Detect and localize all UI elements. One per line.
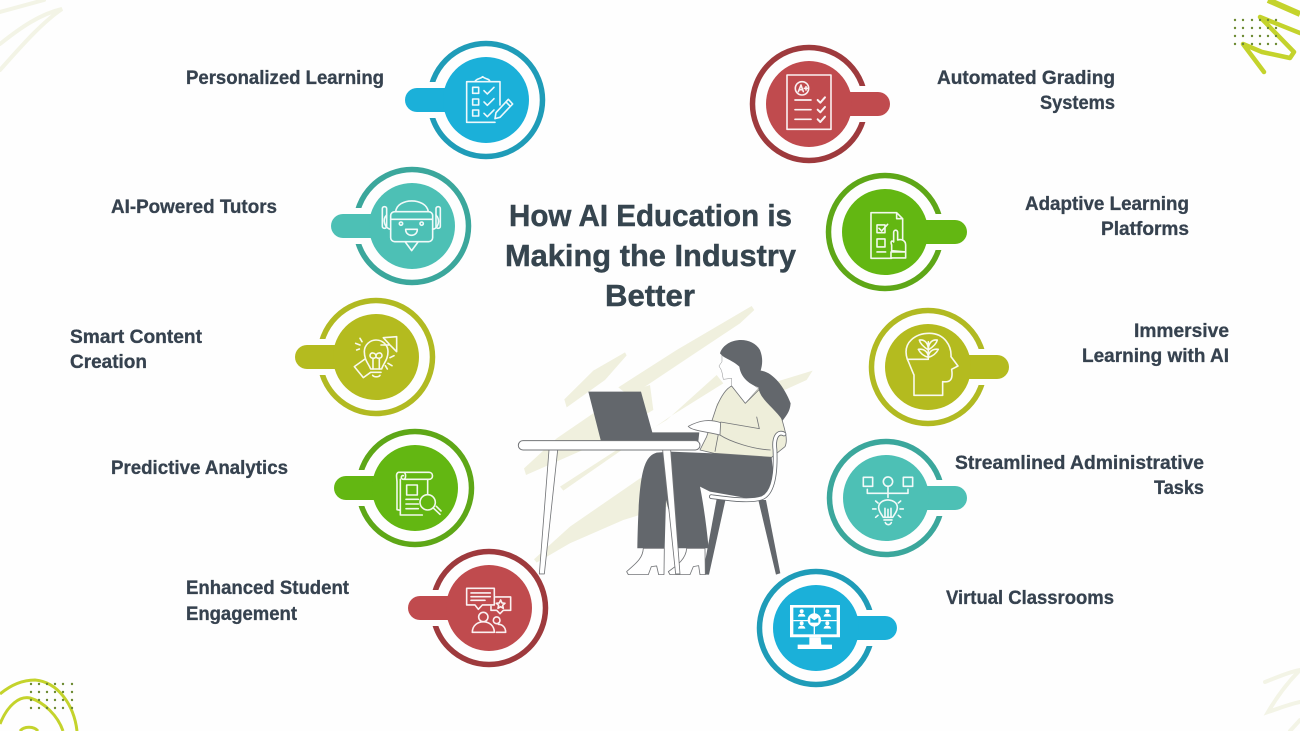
title: Better: [605, 278, 695, 313]
table legs: [539, 450, 558, 574]
label: Enhanced Student Engagement: Engagement: [186, 604, 298, 625]
label: Streamlined Administrative Tasks: Tasks: [1154, 478, 1204, 499]
badge: Immersive Learning with AI: [872, 310, 1009, 424]
label: Enhanced Student Engagement: [186, 578, 350, 625]
chair back and seat: [711, 433, 784, 500]
label: Adaptive Learning Platforms: Platforms: [1101, 219, 1189, 240]
title: [505, 198, 797, 313]
icon: report with magnifier: [397, 472, 441, 515]
face and neck: [719, 355, 758, 403]
boots: [627, 548, 664, 575]
icon: graded A+ paper: [787, 75, 831, 129]
brush strokes behind figure: [524, 306, 813, 563]
ponytail and hair: [720, 340, 791, 421]
table top: [518, 441, 700, 450]
badge: Personalized Learning: [405, 44, 542, 156]
label: Immersive Learning with AI: Learning with AI: [1082, 346, 1229, 367]
icon: head with growing plant: [906, 333, 958, 395]
badge: Predictive Analytics: [334, 432, 472, 544]
badge: Adaptive Learning Platforms: [828, 176, 967, 288]
label: Immersive Learning with AI: [1082, 321, 1229, 367]
label: Enhanced Student Engagement: Enhanced Student: [186, 578, 350, 599]
label: AI-Powered Tutors: AI-Powered Tutors: [111, 197, 277, 218]
label: Immersive Learning with AI: Immersive: [1134, 321, 1229, 342]
label: Automated Grading Systems: Automated Grading: [937, 68, 1115, 89]
badge: Automated Grading Systems: [752, 48, 890, 160]
label: Adaptive Learning Platforms: [1025, 194, 1189, 240]
badge: Smart Content Creation: [295, 300, 432, 414]
badge: Enhanced Student Engagement: [408, 552, 546, 664]
label: Automated Grading Systems: Systems: [1040, 93, 1115, 114]
label: Streamlined Administrative Tasks: Streamlined Administrative: [955, 453, 1204, 474]
decoration: top-right green scribble and dots: [1234, 0, 1300, 72]
label: Virtual Classrooms: Virtual Classrooms: [946, 588, 1114, 609]
label: Predictive Analytics: Predictive Analytics: [111, 458, 288, 479]
label: Smart Content Creation: Creation: [70, 352, 147, 373]
icon: smiling robot: [382, 201, 440, 251]
label: Streamlined Administrative Tasks: [955, 453, 1204, 499]
badge: Streamlined Administrative Tasks: [830, 442, 967, 554]
badge: AI-Powered Tutors: [331, 170, 468, 282]
label: Personalized Learning: Personalized Learning: [186, 68, 384, 89]
decoration: bottom-right pale brush scribble: [1265, 670, 1300, 731]
decoration: bottom-left green arcs and dots: [0, 680, 77, 731]
badge: Virtual Classrooms: [760, 572, 897, 684]
illustration: woman working at laptop: [518, 306, 813, 575]
icon: speech bubbles and people: [467, 588, 511, 632]
icon: flow diagram with bulb: [863, 477, 913, 525]
chair legs: [703, 499, 780, 575]
icon: light bulb with arrow: [354, 337, 397, 378]
label: Smart Content Creation: [70, 327, 203, 373]
label: Automated Grading Systems: [937, 68, 1115, 114]
icon: document with pointing hand: [871, 213, 906, 258]
title: Making the Industry: [505, 238, 797, 273]
decoration: top-left pale brush scribble: [0, 0, 62, 70]
sweater: [700, 386, 786, 457]
trousers: [637, 452, 773, 548]
label: Adaptive Learning Platforms: Adaptive Learning: [1025, 194, 1189, 215]
label: Smart Content Creation: Smart Content: [70, 327, 203, 348]
arm and hand: [715, 417, 771, 452]
icon: video call on monitor: [790, 605, 840, 649]
title: How AI Education is: [509, 198, 792, 233]
laptop: [588, 392, 699, 441]
icon: clipboard checklist and pencil: [467, 77, 513, 122]
